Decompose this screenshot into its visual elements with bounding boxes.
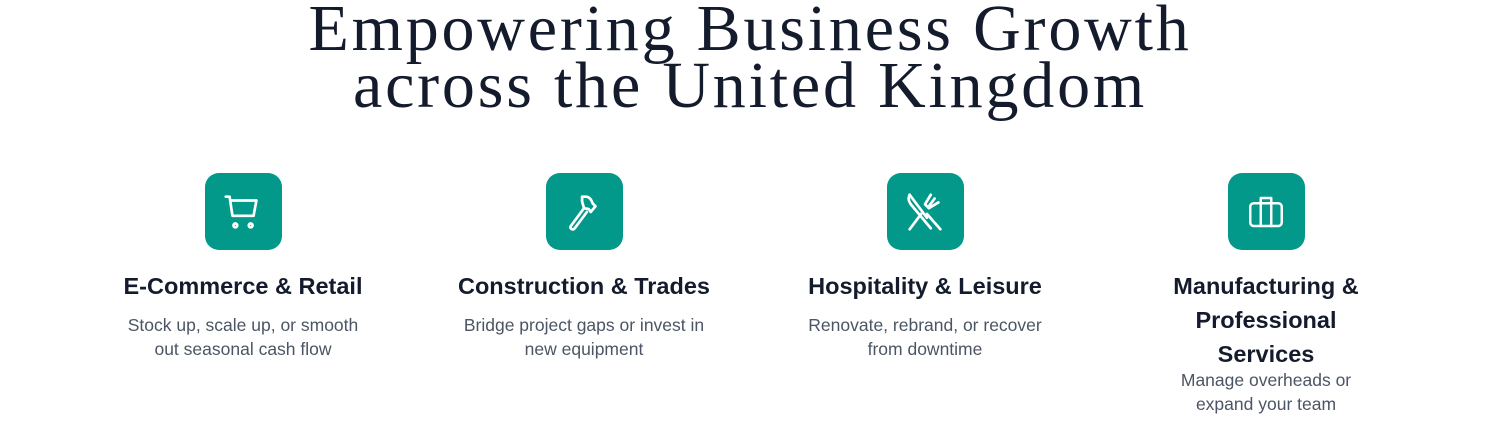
panel: hospitality (808, 173, 1042, 359)
description: out seasonal cash flow (154, 339, 332, 359)
title: across the United Kingdom (353, 49, 1147, 122)
panel: e-commerce (124, 173, 362, 359)
heading: Professional (1195, 307, 1337, 333)
heading: E-Commerce & Retail (124, 273, 362, 299)
heading: Services (1218, 341, 1314, 367)
icon: utensils (886, 173, 964, 250)
description: Renovate, rebrand, or recover (808, 315, 1042, 335)
description: Bridge project gaps or invest in (464, 315, 704, 335)
heading: Manufacturing & (1173, 273, 1359, 299)
icon: cart (204, 173, 282, 250)
panel: construction (458, 173, 710, 359)
description: Stock up, scale up, or smooth (128, 315, 358, 335)
icon: briefcase (1228, 173, 1304, 250)
icon: hammer (546, 173, 622, 250)
description: from downtime (868, 339, 982, 359)
description: Manage overheads or (1181, 370, 1351, 390)
title (308, 0, 1192, 122)
heading (1173, 273, 1359, 367)
heading: Hospitality & Leisure (808, 273, 1042, 299)
description: new equipment (525, 339, 643, 359)
description (464, 315, 704, 359)
heading: Construction & Trades (458, 273, 710, 299)
description: expand your team (1196, 394, 1336, 414)
description (128, 315, 358, 359)
description (1181, 370, 1351, 414)
panel: manufacturing (1173, 173, 1359, 414)
description (808, 315, 1042, 359)
